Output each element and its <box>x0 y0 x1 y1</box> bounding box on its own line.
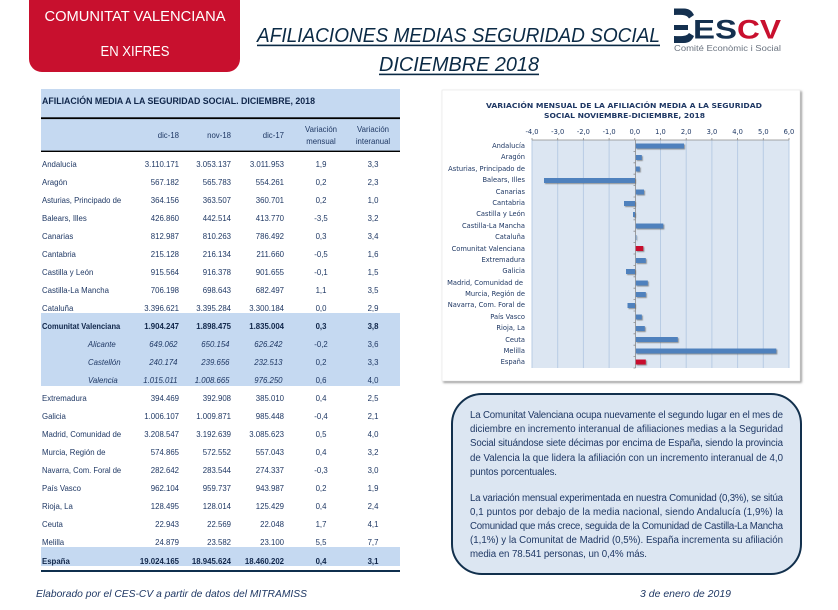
table header band: Variación <box>357 125 389 134</box>
table rows: -0,4 <box>314 412 328 421</box>
table rows: 3,4 <box>368 232 379 241</box>
top axis labels: 2,0 <box>681 128 692 136</box>
category labels: Galicia <box>502 267 525 275</box>
top axis labels: 3,0 <box>707 128 717 136</box>
category labels: Ceuta <box>505 336 525 344</box>
panel: commentary text: Social situándose siete décimas por encima de España, siendo la provincia <box>470 438 784 449</box>
top axis labels <box>525 128 794 136</box>
bars <box>544 144 776 354</box>
panel: table of affiliations <box>41 89 400 572</box>
table rows: 240.174 <box>148 358 178 367</box>
category labels: Canarias <box>496 188 526 196</box>
table rows: -0,5 <box>314 250 328 259</box>
table rows: 0,4 <box>316 502 327 511</box>
panel: commentary text: 0,1 puntos por debajo de la media nacional, siendo Andalucía (1,9%) la <box>470 507 784 518</box>
table rows: Alicante <box>87 340 116 349</box>
table rows: 1.008.665 <box>195 376 230 385</box>
date: 3 de enero de 2019 <box>640 588 731 600</box>
table rows: 1,6 <box>368 250 379 259</box>
table rows: España <box>42 557 70 566</box>
table rows: 0,2 <box>316 484 327 493</box>
table header band <box>41 89 400 152</box>
table rows: 442.514 <box>203 214 231 223</box>
title <box>255 24 660 76</box>
table rows: 3,6 <box>368 340 379 349</box>
table rows: 239.656 <box>200 358 230 367</box>
table rows: Castellón <box>88 358 121 367</box>
table rows: 3,8 <box>368 322 379 331</box>
table rows: 0,2 <box>316 358 327 367</box>
table rows: Extremadura <box>42 394 87 403</box>
table rows: Canarias <box>42 232 73 241</box>
table rows: 786.492 <box>256 232 284 241</box>
table rows: 19.024.165 <box>140 557 179 566</box>
panel: commentary text: La Comunitat Valenciana ocupa nuevamente el segundo lugar en el mes de <box>470 410 783 421</box>
table header band: interanual <box>356 137 390 146</box>
table rows: 0,4 <box>316 448 327 457</box>
category labels: Comunitat Valenciana <box>452 245 525 253</box>
category labels: Castilla y León <box>476 210 525 218</box>
top axis labels: -2,0 <box>577 128 590 136</box>
table rows: Andalucía <box>42 160 77 169</box>
table rows: 3,5 <box>368 286 379 295</box>
title: AFILIACIONES MEDIAS SEGURIDAD SOCIAL <box>255 24 660 47</box>
table rows: 3,0 <box>368 466 379 475</box>
table rows: 4,0 <box>368 430 379 439</box>
table rows: 3.085.623 <box>249 430 284 439</box>
category labels <box>447 142 526 366</box>
panel: commentary text: La variación mensual experimentada en nuestra Comunidad (0,3%), se sitúa <box>470 493 784 504</box>
title: DICIEMBRE 2018 <box>379 53 540 76</box>
table rows: Comunitat Valenciana <box>42 322 121 331</box>
table rows: 1.835.004 <box>249 322 284 331</box>
table rows: 7,7 <box>368 538 379 547</box>
table rows: 23.100 <box>260 538 284 547</box>
table rows: -0,1 <box>314 268 328 277</box>
top axis labels: 1,0 <box>655 128 666 136</box>
table rows: Murcia, Región de <box>42 448 106 457</box>
category labels: Balears, Illes <box>482 176 526 184</box>
table rows: Melilla <box>42 538 65 547</box>
logo: CES-CV <box>674 8 781 53</box>
category labels: Melilla <box>504 347 525 355</box>
category labels: Madrid, Comunidad de <box>447 279 523 287</box>
table rows: 567.182 <box>151 178 179 187</box>
table rows: 3,3 <box>368 160 379 169</box>
table rows: 426.860 <box>151 214 179 223</box>
panel: commentary text: de Valencia la que lidera la afiliación con un incremento interanual de 4,0 <box>470 453 784 464</box>
table rows: Madrid, Comunidad de <box>42 430 122 439</box>
table rows: 3.011.953 <box>250 160 284 169</box>
table rows: País Vasco <box>42 484 81 493</box>
table header band: dic-17 <box>263 131 284 140</box>
category labels: España <box>501 358 525 366</box>
badge: Comunitat Valenciana en xifres: COMUNITAT VALENCIANA <box>44 9 226 25</box>
table rows: 125.429 <box>256 502 284 511</box>
table rows: 3.192.639 <box>196 430 231 439</box>
table rows: 385.010 <box>256 394 284 403</box>
table rows: 360.701 <box>256 196 284 205</box>
table rows: 128.014 <box>203 502 231 511</box>
chart title: SOCIAL NOVIEMBRE-DICIEMBRE, 2018 <box>544 112 705 120</box>
logo: CES-CV: ES <box>693 14 737 44</box>
table rows: 554.261 <box>256 178 284 187</box>
table rows: Aragón <box>42 178 68 187</box>
table rows: 557.043 <box>256 448 284 457</box>
category labels: País Vasco <box>490 313 525 321</box>
table rows: 4,0 <box>368 376 379 385</box>
table rows: 649.062 <box>149 340 178 349</box>
table rows: 364.156 <box>151 196 179 205</box>
top axis labels: 0,0 <box>629 128 640 136</box>
table rows: 3.053.137 <box>196 160 231 169</box>
table rows: 232.513 <box>253 358 283 367</box>
table rows: 18.460.202 <box>245 557 284 566</box>
table rows: 2,3 <box>368 178 379 187</box>
table rows: 211.660 <box>256 250 284 259</box>
table rows: 812.987 <box>151 232 179 241</box>
table header band: AFILIACIÓN MEDIA A LA SEGURIDAD SOCIAL. DICIEMBRE, 2018 <box>42 95 315 106</box>
table rows: 0,0 <box>316 304 327 313</box>
table rows: 18.945.624 <box>192 557 231 566</box>
table rows: 1.015.011 <box>143 376 178 385</box>
table rows: 3.395.284 <box>196 304 231 313</box>
table header band: nov-18 <box>207 131 231 140</box>
top axis labels: 4,0 <box>732 128 743 136</box>
table rows: 3,2 <box>368 214 379 223</box>
table rows: 1,9 <box>368 484 379 493</box>
table rows: 901.655 <box>256 268 284 277</box>
table bottom rule <box>41 570 400 572</box>
highlight band: España <box>41 547 400 566</box>
top axis labels: -4,0 <box>525 128 539 136</box>
table rows: 4,1 <box>368 520 379 529</box>
top axis labels: -1,0 <box>603 128 616 136</box>
highlight band: Comunitat Valenciana <box>41 313 400 386</box>
table rows: 650.154 <box>201 340 230 349</box>
panel: commentary text: media en 78.541 personas, un 0,4% más. <box>470 549 647 560</box>
panel: commentary text: (1,1%) y la Comunitat de Madrid (0,5%). España incrementa su afiliación <box>470 535 783 546</box>
table rows: 392.908 <box>203 394 231 403</box>
chart title: VARIACIÓN MENSUAL DE LA AFILIACIÓN MEDIA A LA SEGURIDAD <box>486 101 762 110</box>
table rows: 1,1 <box>316 286 327 295</box>
panel: commentary text: Comunidad que más crece, seguida de la Comunidad de Castilla-La Mancha <box>470 521 784 532</box>
table header band: mensual <box>306 137 336 146</box>
table rows: 943.987 <box>256 484 284 493</box>
panel: monthly variation bar chart <box>442 90 800 381</box>
logo: CES-CV: CV <box>737 14 781 44</box>
category labels: Castilla-La Mancha <box>462 222 525 230</box>
table rows: 985.448 <box>256 412 284 421</box>
table rows: 1.904.247 <box>144 322 179 331</box>
table rows: 3.396.621 <box>144 304 179 313</box>
table rows: 0,4 <box>316 394 327 403</box>
category labels: Asturias, Principado de <box>448 165 525 173</box>
table rows: 282.642 <box>151 466 179 475</box>
table rows: Asturias, Principado de <box>42 196 122 205</box>
table rows: Castilla-La Mancha <box>42 286 109 295</box>
table rows: 413.770 <box>256 214 284 223</box>
table rows: 916.378 <box>203 268 231 277</box>
table rows: 0,2 <box>316 178 327 187</box>
table rows: 2,1 <box>368 412 379 421</box>
table rows <box>42 160 379 566</box>
table rows: Cataluña <box>42 304 74 313</box>
table rows: 1.898.475 <box>196 322 231 331</box>
table rows: Valencia <box>88 376 118 385</box>
source note: Elaborado por el CES-CV a partir de datos del MITRAMISS <box>36 588 307 600</box>
table rows: 363.507 <box>203 196 231 205</box>
panel: commentary text: diciembre en incremento interanual de afiliaciones medias a la Seguridad <box>470 424 783 435</box>
table rows: 0,3 <box>316 232 327 241</box>
category labels: Rioja, La <box>496 324 525 332</box>
table rows: 22.943 <box>155 520 179 529</box>
category labels: Cantabria <box>492 199 525 207</box>
table rows: 283.544 <box>203 466 231 475</box>
table rows: 215.128 <box>151 250 179 259</box>
category labels: Murcia, Región de <box>465 290 525 298</box>
table rows: 706.198 <box>151 286 179 295</box>
table rows: 565.783 <box>203 178 231 187</box>
category labels: Extremadura <box>482 256 525 264</box>
table rows: 2,5 <box>368 394 379 403</box>
plot area <box>532 140 789 368</box>
badge: Comunitat Valenciana en xifres: EN XIFRES <box>100 44 170 60</box>
table rows: 274.337 <box>256 466 284 475</box>
table rows: 574.865 <box>151 448 179 457</box>
category labels: Navarra, Com. Foral de <box>448 301 525 309</box>
table rows: 1,0 <box>368 196 379 205</box>
table rows: 698.643 <box>203 286 231 295</box>
table rows: -0,3 <box>314 466 328 475</box>
table rows: 0,2 <box>316 196 327 205</box>
table rows: 3,3 <box>368 358 379 367</box>
category labels: Cataluña <box>495 233 525 241</box>
table rows: 1.006.107 <box>144 412 179 421</box>
table rows: 962.104 <box>151 484 179 493</box>
table header band: Variación <box>305 125 337 134</box>
table header band: dic-18 <box>158 131 179 140</box>
panel: commentary text: puntos porcentuales. <box>470 467 557 478</box>
top axis labels: 5,0 <box>758 128 769 136</box>
table rows: 0,6 <box>316 376 327 385</box>
table rows: 572.552 <box>203 448 231 457</box>
top axis labels: 6,0 <box>784 128 794 136</box>
panel: commentary text <box>452 394 801 574</box>
category labels: Andalucía <box>492 142 525 150</box>
table rows: Ceuta <box>42 520 63 529</box>
table rows: 22.569 <box>207 520 231 529</box>
table rows: 682.497 <box>256 286 284 295</box>
table rows: -3,5 <box>314 214 328 223</box>
table rows: Cantabria <box>42 250 76 259</box>
table rows: Navarra, Com. Foral de <box>42 466 122 475</box>
table rows: 1,9 <box>316 160 327 169</box>
table rows: 23.582 <box>207 538 231 547</box>
table rows: 216.134 <box>203 250 231 259</box>
table rows: 128.495 <box>151 502 179 511</box>
table rows: Balears, Illes <box>42 214 87 223</box>
table rows: 0,5 <box>316 430 327 439</box>
table rows: Galicia <box>42 412 66 421</box>
table rows: 5,5 <box>316 538 327 547</box>
logo: CES-CV: Comité Econòmic i Social <box>674 44 781 53</box>
table rows: 3,2 <box>368 448 379 457</box>
table rows: 915.564 <box>151 268 179 277</box>
table rows: 1,7 <box>316 520 327 529</box>
table rows: 959.737 <box>203 484 231 493</box>
table rows: 24.879 <box>155 538 179 547</box>
highlighted bars: Comunitat Valenciana and España <box>636 246 646 364</box>
table rows: 3.110.171 <box>145 160 179 169</box>
table rows: 1,5 <box>368 268 379 277</box>
table rows: 810.263 <box>203 232 231 241</box>
table rows: 1.009.871 <box>196 412 231 421</box>
table rows: 626.242 <box>254 340 283 349</box>
table rows: -0,2 <box>314 340 328 349</box>
top axis labels: -3,0 <box>551 128 564 136</box>
table rows: 0,4 <box>316 557 327 566</box>
table rows: 976.250 <box>254 376 283 385</box>
table rows: 2,9 <box>368 304 379 313</box>
table rows: 3,1 <box>368 557 379 566</box>
category labels: Aragón <box>501 153 525 161</box>
table rows: 2,4 <box>368 502 379 511</box>
chart title <box>486 101 762 120</box>
table rows: Castilla y León <box>42 268 94 277</box>
table rows: 22.048 <box>260 520 284 529</box>
table rows: 394.469 <box>151 394 179 403</box>
badge: Comunitat Valenciana en xifres <box>29 0 240 72</box>
table rows: 3.208.547 <box>144 430 179 439</box>
table rows: 0,3 <box>316 322 327 331</box>
table rows: Rioja, La <box>42 502 73 511</box>
table rows: 3.300.184 <box>249 304 284 313</box>
